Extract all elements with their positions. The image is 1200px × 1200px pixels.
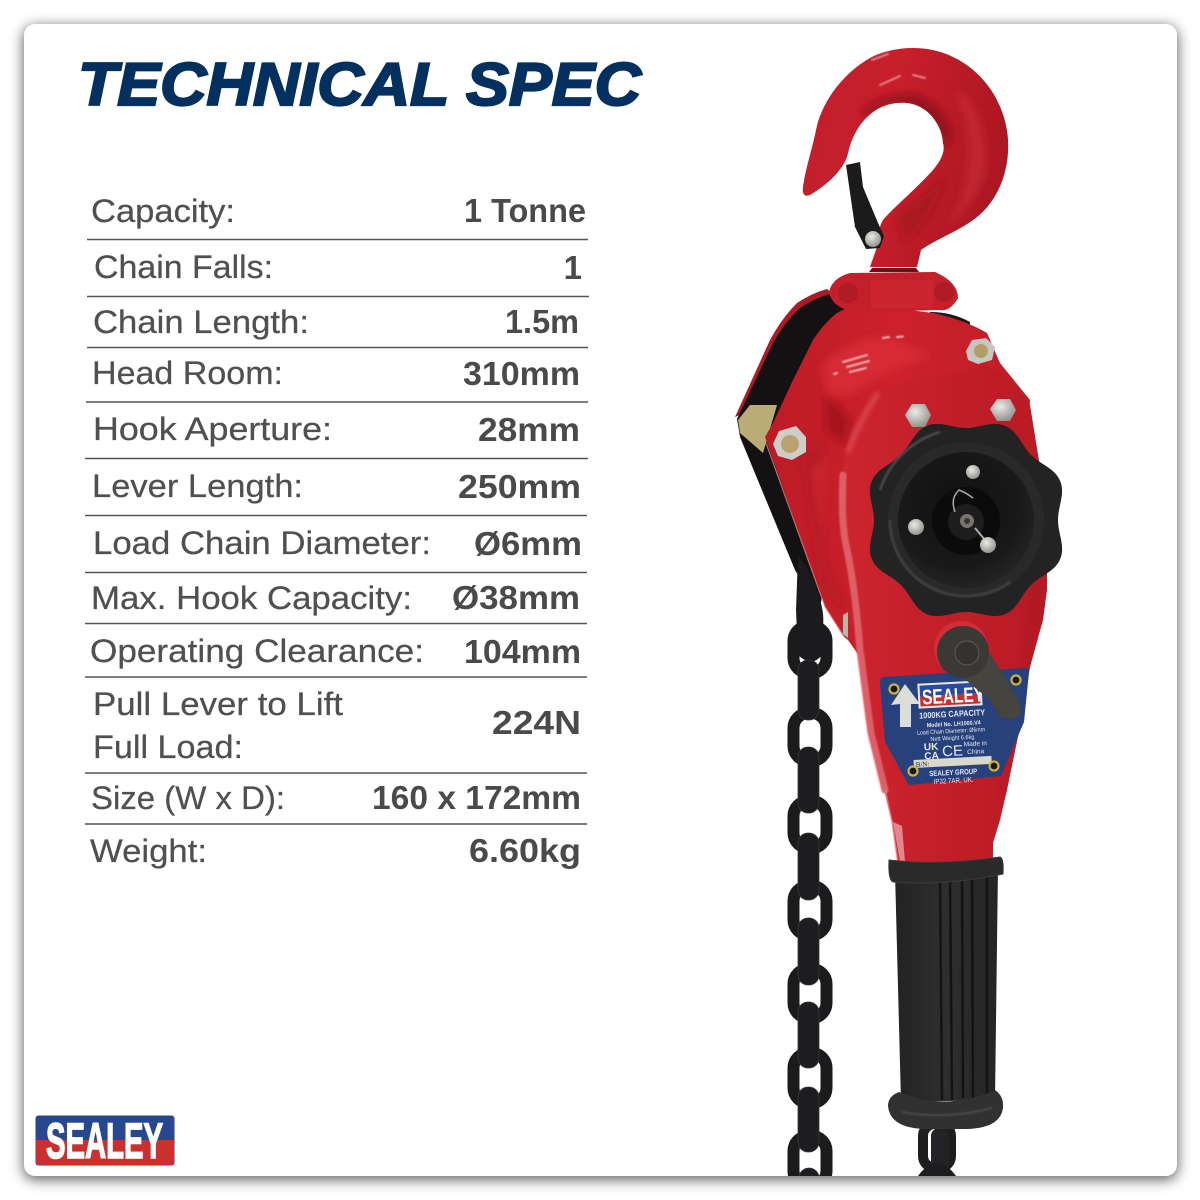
- cover edge highlight: [766, 443, 845, 638]
- logo: Sealey: SEALEY: [46, 1113, 163, 1169]
- handle grip: [888, 857, 1003, 1129]
- plate logo: SEALEY: [922, 683, 985, 709]
- row: head room: 310mm: [463, 355, 580, 392]
- plate logo: [917, 680, 985, 710]
- row: hook aperture: [85, 411, 588, 458]
- plate text: Made in: [964, 740, 987, 748]
- row: max hook capacity: Max. Hook Capacity:: [91, 580, 412, 616]
- plate shoulder shine: [848, 393, 878, 452]
- bolt: top right of knob: [990, 399, 1016, 421]
- row: lever length: [85, 468, 587, 516]
- back plate: [735, 289, 970, 610]
- back plate rim: [735, 289, 830, 417]
- row: pull lever: Full Load:: [93, 729, 243, 765]
- row: size: [85, 779, 587, 824]
- row: capacity: 1 Tonne: [464, 192, 586, 229]
- row: operating clearance: [85, 633, 587, 677]
- hook: [803, 48, 1008, 267]
- row: chain length: 1.5m: [505, 303, 579, 340]
- hook highlights: [872, 54, 925, 85]
- grip body: [895, 866, 998, 1102]
- plate text: Nett Weight 6.6kg: [930, 735, 975, 743]
- row: chain falls: 1: [564, 249, 582, 286]
- plate rivets: [890, 676, 1020, 776]
- knob centre: [960, 514, 974, 528]
- hook shading: [862, 92, 986, 245]
- plate text: CE: [942, 742, 963, 760]
- cover lower stud: [843, 612, 848, 638]
- row: load chain diameter: Load Chain Diameter:: [93, 525, 431, 561]
- back plate brass: [738, 405, 777, 453]
- knob: [870, 424, 1062, 616]
- plate text: 1000KG CAPACITY: [919, 707, 986, 721]
- row: load chain diameter: [85, 525, 587, 572]
- plate text: SEALEY GROUP: [929, 767, 977, 778]
- row: chain length: Chain Length:: [93, 304, 309, 340]
- row: capacity: Capacity:: [91, 193, 235, 229]
- back plate black: [737, 294, 845, 603]
- plate right shading: [1029, 643, 1037, 674]
- product: lever hoist: [735, 48, 1080, 1198]
- row: chain length: [87, 303, 588, 348]
- row: pull lever: [85, 686, 587, 773]
- plate text: IP32 7AR, UK.: [934, 777, 974, 786]
- cover contour shading: [804, 340, 920, 598]
- row: hook aperture: 28mm: [478, 411, 580, 448]
- front plate: [864, 404, 1047, 862]
- bolt: top left of knob: [905, 404, 931, 427]
- row: size: 160 x 172mm: [372, 779, 581, 816]
- neck highlight: [893, 822, 905, 862]
- plate pink edge stripe: [842, 475, 885, 790]
- row: operating clearance: 104mm: [464, 633, 581, 670]
- load chain: under handle: [918, 1128, 956, 1176]
- logo: Sealey: [36, 1113, 174, 1169]
- plate lower edge highlight: [885, 790, 898, 864]
- load chain: left: [794, 556, 826, 1198]
- grip bottom flange: [888, 1090, 1003, 1129]
- knob screws: [966, 465, 980, 479]
- row: head room: [86, 355, 588, 402]
- row: weight: [90, 832, 581, 869]
- plate text: CA: [924, 751, 939, 762]
- row: chain falls: Chain Falls:: [94, 249, 273, 285]
- title: TECHNICAL SPEC: [78, 50, 642, 118]
- row: max hook capacity: Ø38mm: [452, 579, 580, 616]
- cover plate: [765, 305, 1030, 660]
- plate arrow: [891, 684, 920, 727]
- row: operating clearance: Operating Clearance:: [90, 633, 424, 669]
- latch pin: [865, 231, 881, 247]
- plate text: B/N:: [916, 760, 930, 769]
- row: load chain diameter: Ø6mm: [474, 525, 582, 562]
- swivel block: [829, 268, 958, 312]
- grip ribs: [940, 874, 987, 1100]
- lever pawl: [934, 621, 1021, 719]
- hoist body: [765, 305, 1047, 866]
- nut: upper right: [966, 338, 995, 364]
- row: head room: Head Room:: [92, 355, 283, 391]
- plate text: Load Chain Diameter: Ø6mm: [917, 727, 985, 737]
- row: weight: Weight:: [90, 833, 207, 869]
- grip top rim: [889, 857, 1003, 883]
- row: max hook capacity: [85, 579, 587, 624]
- plate text: Model No. LH1000.V4: [927, 720, 981, 729]
- row: weight: 6.60kg: [469, 832, 581, 869]
- row: pull lever: Pull Lever to Lift: [93, 686, 343, 722]
- row: size: Size (W x D):: [91, 780, 285, 816]
- rating plate: [880, 668, 1029, 787]
- row: lever length: Lever Length:: [92, 468, 303, 504]
- spec table: [85, 192, 589, 869]
- cover highlights: [834, 336, 903, 374]
- row: lever length: 250mm: [458, 468, 581, 505]
- row: chain falls: [87, 249, 589, 296]
- row: capacity: [87, 192, 588, 240]
- safety latch: [846, 162, 884, 249]
- row: pull lever: 224N: [492, 704, 581, 741]
- plate text: [914, 709, 992, 784]
- plate text: China: [967, 748, 985, 756]
- row: hook aperture: Hook Aperture:: [93, 411, 332, 447]
- nut: left: [773, 426, 806, 460]
- plate text: UK: [924, 742, 939, 753]
